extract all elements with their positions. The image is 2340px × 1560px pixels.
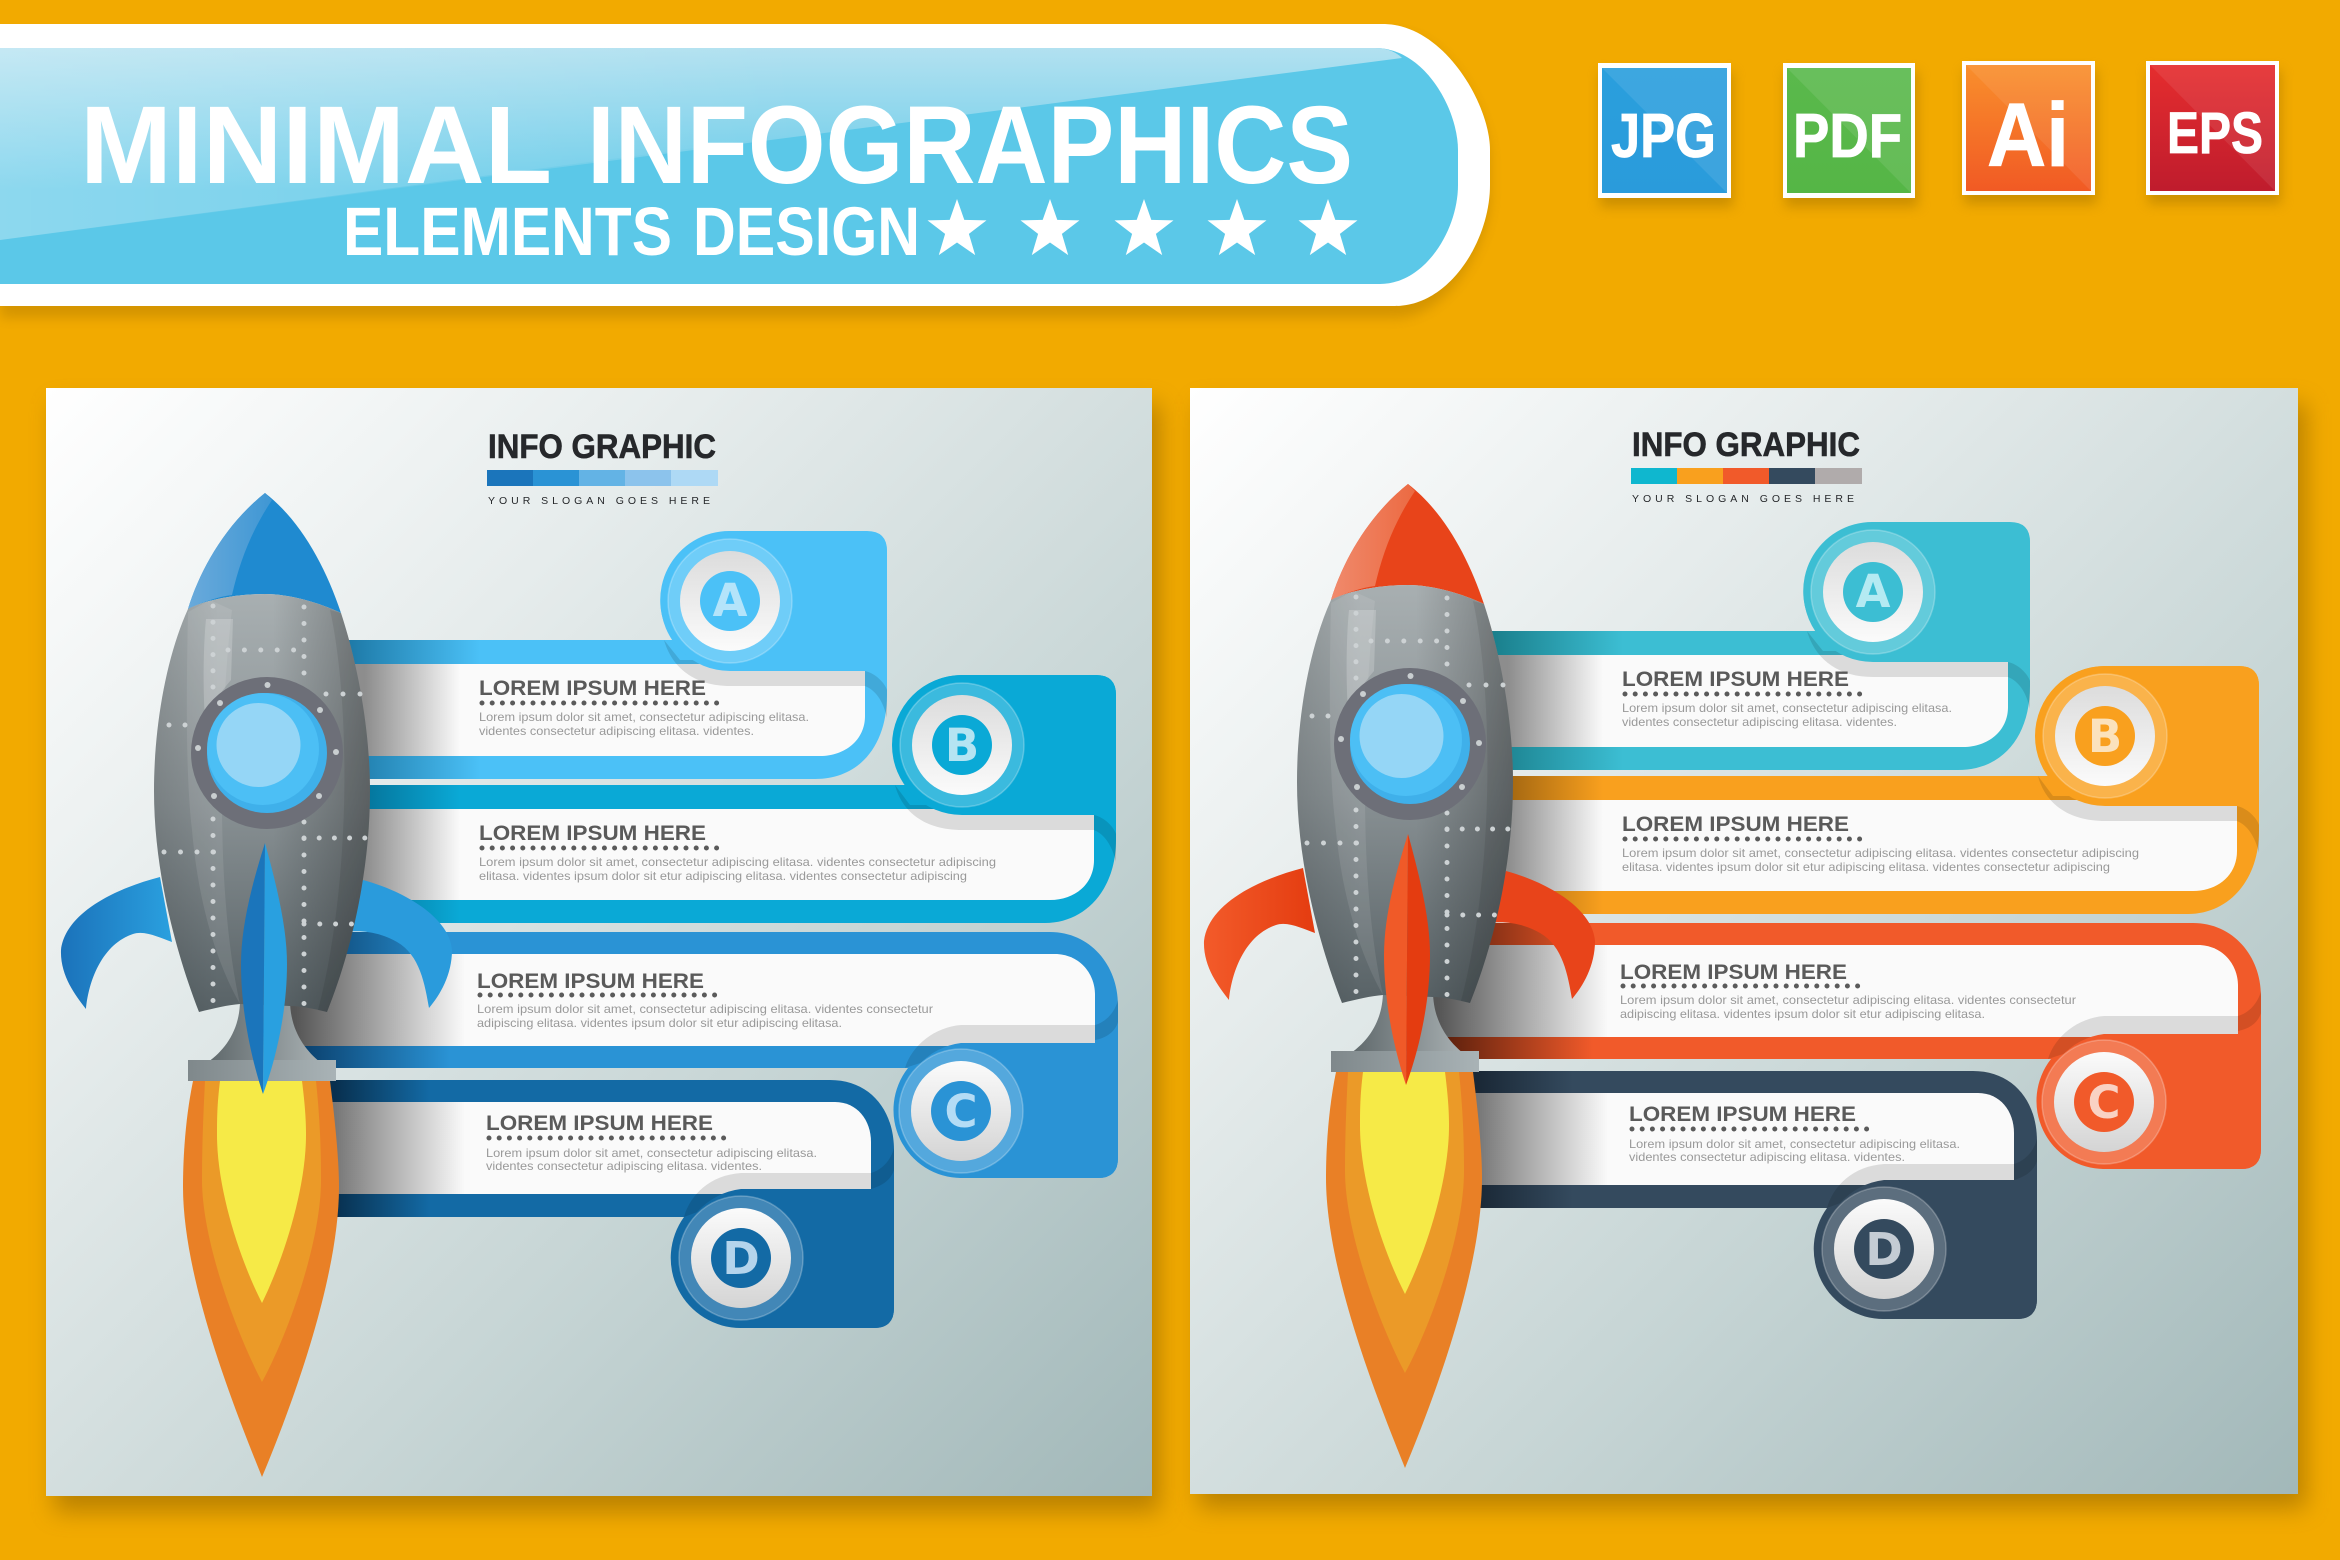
ribbon A: LOREM IPSUM HERE [479, 677, 706, 700]
banner headline: MINIMAL [80, 84, 552, 207]
rocket [61, 493, 452, 1094]
ribbon B [340, 675, 1116, 923]
ribbon A: videntes consectetur adipiscing elitasa. videntes. [479, 724, 754, 738]
ribbon C [1433, 923, 2261, 1169]
icon: Ai [1962, 61, 2097, 204]
content group [1204, 484, 2261, 1468]
ribbon A [300, 531, 887, 779]
ribbon D: LOREM IPSUM HERE [1629, 1103, 1856, 1126]
ribbon C: adipiscing elitasa. videntes ipsum dolor sit etur adipiscing elitasa. [477, 1016, 842, 1030]
icon: PDF: PDF [1793, 102, 1902, 171]
flame [1326, 1072, 1482, 1468]
ribbon A: A [713, 574, 748, 627]
ribbon D: videntes consectetur adipiscing elitasa. videntes. [486, 1159, 762, 1173]
ribbon C: C [2087, 1076, 2121, 1129]
icon: Ai: Ai [1987, 86, 2069, 186]
ribbon C: Lorem ipsum dolor sit amet, consectetur adipiscing elitasa. videntes consectetur [1620, 993, 2076, 1007]
ribbon A: Lorem ipsum dolor sit amet, consectetur adipiscing elitasa. [479, 710, 809, 724]
banner headline [80, 84, 1353, 207]
title banner [0, 24, 1490, 318]
panel heading: YOUR SLOGAN GOES HERE [488, 495, 710, 507]
ribbon D [330, 1080, 894, 1328]
ribbon C: LOREM IPSUM HERE [477, 970, 704, 993]
ribbon B: LOREM IPSUM HERE [479, 822, 706, 845]
ribbon A [1443, 522, 2030, 770]
banner subhead [343, 193, 920, 270]
flame [183, 1081, 339, 1477]
ribbon B: Lorem ipsum dolor sit amet, consectetur adipiscing elitasa. videntes consectetur adipiscing [479, 855, 996, 869]
ribbon D: videntes consectetur adipiscing elitasa. videntes. [1629, 1150, 1905, 1164]
ribbon C: adipiscing elitasa. videntes ipsum dolor sit etur adipiscing elitasa. [1620, 1007, 1985, 1021]
ribbon B [1483, 666, 2259, 914]
rating stars [928, 199, 1358, 255]
ribbon D: Lorem ipsum dolor sit amet, consectetur adipiscing elitasa. [1629, 1137, 1960, 1151]
icon: JPG: JPG [1611, 102, 1716, 171]
panel heading: YOUR SLOGAN GOES HERE [1632, 493, 1854, 505]
panel heading: INFO GRAPHIC [1632, 426, 1860, 464]
panel heading [487, 428, 718, 507]
ribbon A: LOREM IPSUM HERE [1622, 668, 1849, 691]
ribbon C: LOREM IPSUM HERE [1620, 961, 1847, 984]
ribbon B: B [2088, 710, 2122, 763]
ribbon D: LOREM IPSUM HERE [486, 1112, 713, 1135]
ribbon A: videntes consectetur adipiscing elitasa. videntes. [1622, 715, 1897, 729]
icon: EPS: EPS [2167, 101, 2263, 166]
ribbon D [1473, 1071, 2037, 1319]
ribbon A: A [1856, 565, 1891, 618]
panel heading: INFO GRAPHIC [488, 428, 716, 466]
ribbon B: elitasa. videntes ipsum dolor sit etur adipiscing elitasa. videntes consectetur adipiscing [479, 869, 967, 883]
ribbon D: Lorem ipsum dolor sit amet, consectetur adipiscing elitasa. [486, 1146, 817, 1160]
ribbon B: Lorem ipsum dolor sit amet, consectetur adipiscing elitasa. videntes consectetur adipiscing [1622, 846, 2139, 860]
icon: EPS [2146, 61, 2281, 204]
panel: blue version [46, 388, 1160, 1512]
icon: JPG [1598, 63, 1733, 207]
rocket [1204, 484, 1595, 1085]
ribbon B: elitasa. videntes ipsum dolor sit etur adipiscing elitasa. videntes consectetur adipiscing [1622, 860, 2110, 874]
panel heading [1631, 426, 1862, 505]
ribbon C: C [944, 1085, 978, 1138]
ribbon C [290, 932, 1118, 1178]
banner subhead: DESIGN [693, 193, 920, 270]
icon: PDF [1783, 63, 1918, 207]
ribbon D: D [722, 1232, 760, 1285]
banner subhead: ELEMENTS [343, 193, 672, 270]
panel: multicolor version [1190, 388, 2306, 1508]
ribbon C: Lorem ipsum dolor sit amet, consectetur adipiscing elitasa. videntes consectetur [477, 1002, 933, 1016]
ribbon A: Lorem ipsum dolor sit amet, consectetur adipiscing elitasa. [1622, 701, 1952, 715]
ribbon D: D [1865, 1223, 1903, 1276]
ribbon B: B [945, 719, 979, 772]
banner headline: INFOGRAPHICS [587, 84, 1353, 207]
ribbon B: LOREM IPSUM HERE [1622, 813, 1849, 836]
